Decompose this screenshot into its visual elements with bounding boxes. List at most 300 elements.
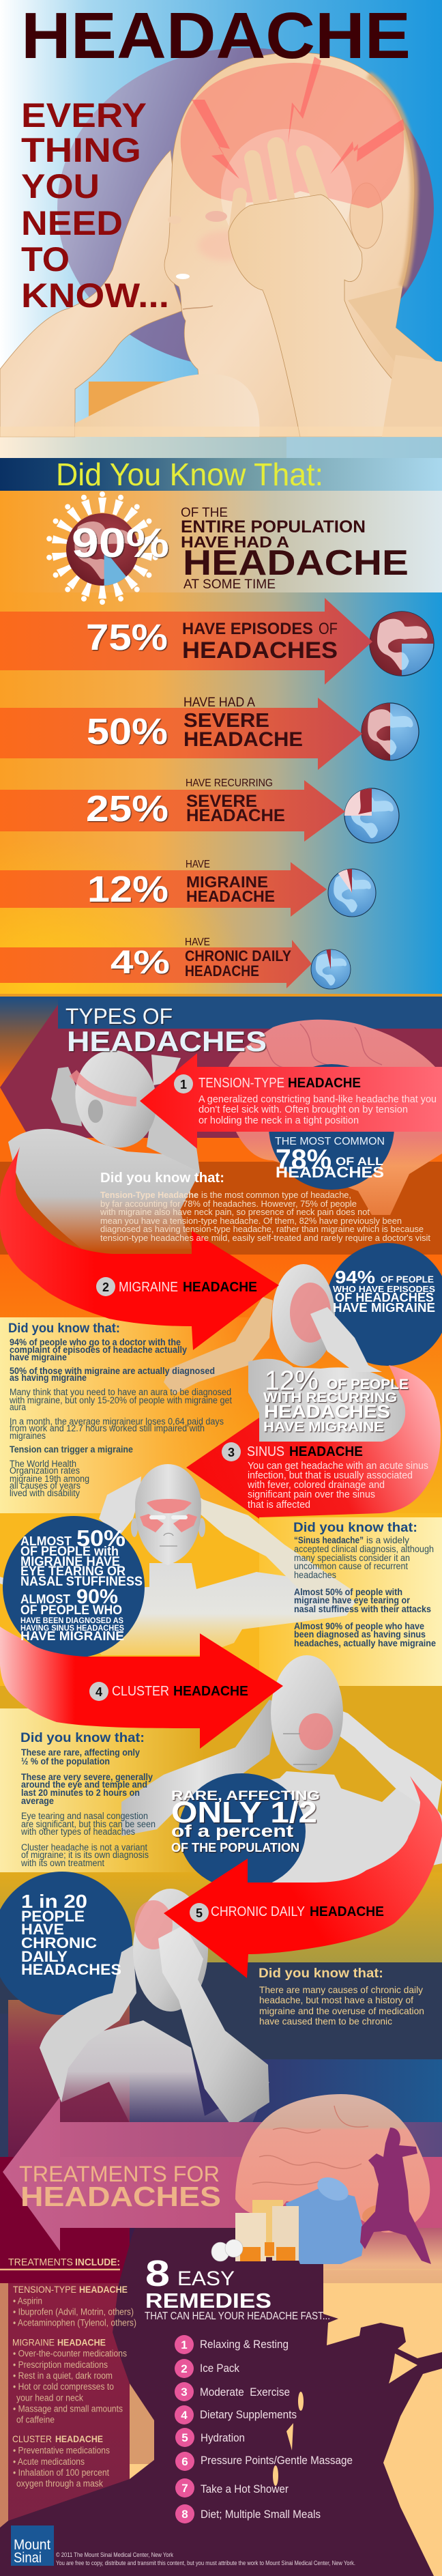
callout: 78 percent: THE MOST COMMON: [275, 1136, 385, 1147]
treatments include: HEADACHE: [57, 2337, 106, 2348]
90 percent caption: HAVE HAD A: [181, 533, 289, 551]
90 percent caption: OF THE: [181, 506, 228, 520]
text: tension-type facts: tension-type headaches are mild, easily self-treated and rarely require a doctor's visit: [100, 1233, 431, 1243]
callout: 1 in 20: PEOPLE: [21, 1908, 85, 1925]
text: migraine facts: migraines: [10, 1431, 46, 1441]
callout: 50 and 90 percent: MIGRAINE HAVE: [20, 1555, 120, 1569]
sinus description: that is affected: [248, 1499, 310, 1511]
treatment bullets: • Acetaminophen (Tylenol, others): [13, 2318, 136, 2328]
tension-type description: don't feel sick with. Often brought on by tension: [198, 1104, 408, 1115]
subtitle: NEED: [21, 204, 123, 242]
remedies list: 5: [181, 2431, 188, 2444]
tension-type heading: [198, 1076, 361, 1091]
text: migraine facts: aura: [10, 1402, 26, 1412]
remedies list: [175, 2335, 353, 2523]
callout: 50 and 90 percent: HAVE BEEN DIAGNOSED AS: [20, 1617, 123, 1625]
man 5 chronic: [40, 1889, 269, 2126]
text: migraine facts: 50% of those with migraine are actually diagnosed: [10, 1366, 215, 1376]
text: cluster facts: These are very severe, generally: [21, 1772, 153, 1782]
cerebellum: [362, 2204, 410, 2229]
text: cluster facts: [20, 1731, 156, 1868]
callout: 12 percent: [263, 1366, 409, 1435]
text: migraine facts: from work and 12.7 hours worked still impaired with: [10, 1423, 205, 1433]
torso: [205, 1771, 442, 1884]
callout: 1 in 20: 1 in 20: [21, 1891, 87, 1912]
90 percent caption: ENTIRE POPULATION: [181, 517, 366, 536]
label: migraine headache: HEADACHE: [183, 1280, 257, 1295]
arrow 4 cluster: [0, 1627, 283, 1749]
treatment bullets: • Ibuprofen (Advil, Motrin, others): [13, 2307, 134, 2317]
arrow 75 percent: HAVE EPISODES: [182, 620, 313, 638]
callout: 50 and 90 percent: NASAL STUFFINESS: [20, 1575, 143, 1589]
text: cluster facts: Eye tearing and nasal congestion: [21, 1811, 148, 1821]
footer credits: You are free to copy, distribute and transmit this content, but you must attribute the work to Mount Sinai Medical Center, New York.: [56, 2560, 355, 2567]
head of man: [164, 53, 442, 437]
callout: 78 percent: OF ALL: [336, 1155, 383, 1168]
text: cluster facts: with other types of headaches: [20, 1827, 135, 1837]
arrow 2 migraine: [0, 1147, 279, 1350]
text: cluster facts: around the eye and temple and: [21, 1779, 147, 1790]
section: treatments: [0, 2094, 442, 2576]
text: migraine facts: In a month, the average migraineur loses 0.64 paid days: [10, 1416, 224, 1427]
circle: 1 in 20: [0, 1872, 132, 2015]
sinus description: You can get headache with an acute sinus: [248, 1460, 428, 1472]
treatment bullets: • Rest in a quiet, dark room: [13, 2371, 113, 2381]
text: sinus facts: “Sinus headache”: [294, 1535, 364, 1545]
sinus description: significant pain over the sinus: [248, 1489, 375, 1500]
text: sinus facts: [293, 1521, 436, 1648]
25 percent value: 25%: [86, 788, 168, 829]
text: chronic daily facts: [259, 1966, 424, 2027]
sinus description: with fever, colored drainage and: [247, 1479, 385, 1491]
text: migraine facts: all causes of years: [10, 1480, 80, 1491]
arrow 4 percent: HEADACHE: [185, 962, 259, 979]
ice pack: [286, 2173, 365, 2264]
tension-type heading: HEADACHE: [288, 1076, 361, 1091]
text: cluster facts: with its own treatment: [20, 1858, 104, 1868]
label: chronic daily headache: 5: [196, 1906, 203, 1920]
ears: [131, 1518, 138, 1537]
remedies list: Relaxing & Resting: [200, 2338, 289, 2351]
text: cluster facts: of migraine; it is its own diagnosis: [21, 1850, 149, 1860]
label: chronic daily headache: [190, 1903, 384, 1922]
migraine panel: [0, 1317, 273, 1513]
90 percent caption: [181, 506, 409, 592]
callout: 1 in 20: CHRONIC: [21, 1934, 97, 1951]
section: did you know statistics: [0, 458, 442, 997]
label: sinus headache: HEADACHE: [289, 1444, 363, 1459]
remedies list: Moderate Exercise: [200, 2386, 290, 2399]
treatments include: MIGRAINE: [12, 2337, 55, 2348]
text: tension-type facts: with migraine also have neck pain, so presence of neck pain does not: [100, 1207, 370, 1217]
text: migraine facts: The World Health: [10, 1459, 76, 1469]
callout: 94 percent: WHO HAVE EPISODES: [333, 1284, 435, 1294]
text: tension-type facts: diagnosed as having tension-type headache, rather than migraine which is because: [100, 1225, 424, 1234]
bordeaux arrow behind title: [0, 1005, 442, 1138]
medication bottles: [235, 2200, 299, 2261]
treatment bullets: • Prescription medications: [13, 2360, 108, 2370]
background circle: [57, 48, 434, 369]
text: chronic daily facts: migraine and the overuse of medication: [259, 2005, 424, 2016]
arrow 12 percent: MIGRAINE: [186, 873, 268, 891]
head: [271, 1655, 343, 1771]
text: sinus facts: Almost 90% of people who have: [294, 1621, 424, 1631]
treatment bullets: • Over-the-counter medications: [13, 2348, 127, 2359]
treatments include: CLUSTER: [12, 2433, 52, 2444]
callout: 50 and 90 percent: EYE TEARING OR: [20, 1564, 126, 1579]
globe 4 percent: [311, 945, 351, 989]
callout: 50 and 90 percent: [20, 1526, 143, 1643]
globe 50 percent: [361, 702, 419, 761]
arrow 1 tension: [140, 1053, 442, 1149]
subtitle: [21, 96, 169, 315]
arrow 50 percent: HAVE HAD A: [183, 696, 255, 710]
text: tension-type facts: Did you know that:: [100, 1171, 224, 1186]
text: migraine facts: Organization rates: [10, 1465, 80, 1476]
pills: [211, 2239, 243, 2261]
lower fade: [0, 427, 442, 458]
globe 25 percent: [344, 788, 400, 844]
arrow 50 percent: SEVERE: [183, 710, 269, 732]
man 1 tension: [8, 1042, 200, 1251]
callout: 12 percent: HAVE MIGRAINE: [263, 1420, 384, 1435]
heading: 8 easy remedies: [145, 2253, 330, 2322]
callout: 94 percent: [333, 1267, 435, 1315]
callout: rare: ONLY 1/2: [171, 1796, 317, 1829]
eyes and mouth: [168, 211, 252, 309]
callout: rare: RARE, AFFECTING: [171, 1789, 320, 1803]
callout: 50 and 90 percent: 50%: [76, 1526, 126, 1551]
tension-type heading: TENSION-TYPE: [198, 1076, 284, 1091]
subtitle: THING: [21, 131, 141, 169]
table edge: [89, 382, 198, 437]
hands: [51, 1067, 82, 1126]
label: chronic daily headache: HEADACHE: [310, 1904, 384, 1919]
remedies list: 4: [181, 2409, 188, 2422]
text: cluster facts: These are rare, affecting only: [21, 1747, 140, 1758]
head shading: [368, 75, 414, 287]
text: cluster facts: last 20 minutes to 2 hours on: [21, 1788, 140, 1798]
head: [135, 1464, 201, 1565]
remedies list: 3: [181, 2386, 188, 2399]
sinus description: infection, but that is usually associated: [248, 1470, 413, 1481]
callout: rare: OF THE POPULATION: [171, 1841, 299, 1855]
text: chronic daily facts: have caused them to be chronic: [259, 2016, 392, 2027]
banner: [0, 458, 442, 491]
subtitle: YOU: [21, 167, 100, 205]
remedies list: 7: [181, 2482, 188, 2495]
man 4 cluster: [121, 1655, 442, 1884]
callout: 1 in 20: HAVE: [21, 1921, 64, 1938]
arrow 25 percent: HEADACHE: [186, 806, 285, 825]
callout: 78 percent: HEADACHES: [276, 1164, 384, 1181]
75 percent value: 75%: [86, 617, 168, 658]
treatments include: TENSION-TYPE: [13, 2284, 76, 2295]
remedies list: 2: [181, 2362, 188, 2375]
text: migraine facts: migraine 19th among: [10, 1474, 89, 1484]
label: chronic daily headache: CHRONIC DAILY: [211, 1904, 305, 1919]
chest: [382, 355, 442, 437]
tension-type description: or holding the neck in a tight position: [198, 1115, 359, 1126]
text: sinus facts: Did you know that:: [293, 1521, 417, 1535]
text: migraine facts: with migraine, but only 15-20% of people with migraine get: [9, 1395, 232, 1405]
label: cluster headache: [89, 1682, 248, 1701]
globe 75 percent: [369, 611, 434, 676]
arrow 4 percent: CHRONIC DAILY: [185, 947, 291, 964]
callout: 50 and 90 percent: ALMOST: [20, 1592, 70, 1606]
50 percent value: 50%: [87, 711, 168, 752]
treatment bullets: • Massage and small amounts: [13, 2404, 123, 2414]
near hand and forearm: [229, 195, 442, 437]
left hand: [99, 1476, 141, 1536]
text: migraine facts: complaint of episodes of headache actually: [10, 1345, 187, 1355]
treatment bullets: • Preventative medications: [13, 2446, 110, 2456]
far arm: [0, 150, 183, 437]
text: sinus facts: accepted clinical diagnosis, although: [294, 1544, 434, 1554]
remedies list: Take a Hot Shower: [201, 2482, 289, 2495]
pain mask: [140, 1499, 197, 1532]
banner heading: Did You Know That:: [56, 457, 323, 492]
text: migraine facts: have migraine: [10, 1352, 67, 1362]
callout: 12 percent: 12%: [265, 1366, 319, 1396]
arrow 50 percent: [0, 696, 362, 770]
arrow 25 percent: [0, 777, 345, 842]
text: cluster facts: are significant, but this can be seen: [21, 1819, 156, 1829]
treatment bullets: • Acute medications: [13, 2457, 85, 2467]
remedies list: Diet; Multiple Small Meals: [201, 2508, 321, 2521]
text: tension-type facts: mean you have a tension-type headache. Of them, 82% have previously been: [100, 1216, 402, 1226]
text: chronic daily facts: There are many causes of chronic daily: [259, 1984, 423, 1995]
90 percent caption: AT SOME TIME: [183, 577, 276, 592]
callout: 50 and 90 percent: OF PEOPLE WHO: [20, 1603, 122, 1618]
arrow 3 sinus: [186, 1365, 441, 1519]
man 2 migraine: [164, 1264, 430, 1442]
text: sinus facts: many specialists consider it an: [294, 1553, 410, 1563]
title: treatments for headaches: [19, 2162, 221, 2212]
label: migraine headache: MIGRAINE: [119, 1280, 178, 1295]
forearm and hand: [194, 1493, 353, 1609]
text: migraine facts: 94% of people who go to a doctor with the: [10, 1337, 181, 1347]
horizontal rule: [0, 2269, 442, 2270]
left arm: [121, 1700, 276, 1836]
arrow 5 chronic: [164, 1776, 442, 1978]
90 percent caption: HEADACHE: [183, 543, 409, 583]
pain glow: [221, 129, 352, 260]
arrow 4 percent: HAVE: [185, 936, 210, 948]
text: migraine facts: Many think that you need to have an aura to be diagnosed: [10, 1387, 231, 1397]
text: sinus facts: headaches: [294, 1570, 336, 1580]
brain illustration: [222, 1020, 442, 1215]
heading: 8 easy remedies: THAT CAN HEAL YOUR HEADACHE FAST...: [145, 2310, 330, 2322]
text: sinus facts: is a widely: [366, 1535, 409, 1545]
text: tension-type facts: by far accounting for 78% of headaches. However, 75% of people: [100, 1199, 357, 1209]
remedies list: 1: [181, 2338, 188, 2351]
brain overlay: [181, 63, 404, 208]
treatment bullets: • Inhalation of 100 percent: [13, 2467, 109, 2478]
pink arrow: [3, 2097, 442, 2251]
text: sinus facts: nasal stuffiness with their attacks: [294, 1604, 431, 1614]
heading: 8 easy remedies: EASY: [177, 2267, 235, 2290]
treatment bullets: • Aspirin: [13, 2296, 42, 2306]
title: types of headaches: [65, 1004, 267, 1057]
treatment bullets: [13, 2296, 136, 2489]
neck shading: [348, 287, 437, 372]
hand fingers: [235, 146, 322, 232]
arrow 4 percent: [0, 936, 312, 988]
callout: 12 percent: HEADACHES: [264, 1401, 390, 1422]
label: migraine headache: [96, 1277, 257, 1296]
circle: 50 and 90 percent: [3, 1516, 145, 1658]
shoulder: [75, 374, 260, 437]
arrow 25 percent: SEVERE: [186, 792, 257, 811]
torso: [248, 1359, 430, 1442]
label: migraine headache: 2: [102, 1280, 109, 1294]
silhouette figure: [360, 2128, 431, 2264]
text: cluster facts: Cluster headache is not a variant: [21, 1842, 147, 1852]
label: sinus headache: SINUS: [247, 1444, 284, 1459]
dark silhouette: [0, 2228, 442, 2576]
callout: 1 in 20: DAILY: [21, 1948, 68, 1965]
90 percent figure: 90%: [72, 520, 169, 566]
text: migraine facts: Did you know that:: [8, 1321, 120, 1336]
treatments include: TREATMENTS: [8, 2257, 73, 2268]
text: migraine facts: as having migraine: [10, 1373, 87, 1383]
callout: 12 percent: OF PEOPLE: [327, 1377, 409, 1392]
title: treatments for headaches: TREATMENTS FOR: [19, 2162, 220, 2186]
callout: 1 in 20: [21, 1891, 121, 1978]
footer credits: © 2011 The Mount Sinai Medical Center, New York: [56, 2551, 173, 2559]
pain area: [290, 1283, 331, 1343]
callout: 78 percent: 78%: [276, 1143, 332, 1175]
title: types of headaches: HEADACHES: [67, 1025, 267, 1057]
sinus panel: [259, 1517, 442, 1686]
main title: HEADACHE: [21, 0, 411, 72]
callout: 50 and 90 percent: HAVE MIGRAINE: [20, 1629, 124, 1643]
section: types of headaches background: [0, 997, 442, 2287]
lower page backgrounds: [0, 2283, 442, 2576]
brain: [235, 2094, 430, 2233]
text: sinus facts: headaches, actually have migraine: [294, 1638, 436, 1648]
remedies list: Hydration: [201, 2431, 245, 2444]
silhouette gaps: [273, 2353, 417, 2486]
arrow 50 percent: HEADACHE: [183, 728, 303, 751]
remedies list: Dietary Supplements: [200, 2408, 297, 2421]
treatment bullets: oxygen through a mask: [16, 2478, 103, 2489]
number 1: 1: [180, 1078, 187, 1091]
label: sinus headache: 3: [228, 1446, 235, 1459]
text: chronic daily facts: headache, but most have a history of: [259, 1994, 413, 2005]
callout: 78 percent: [275, 1136, 385, 1181]
title: treatments for headaches: HEADACHES: [20, 2181, 221, 2212]
label: sinus headache: [222, 1442, 428, 1511]
circle: 94 percent: [326, 1243, 442, 1366]
arm: [164, 1297, 273, 1394]
pain band: [73, 1073, 136, 1102]
text: migraine facts: [8, 1321, 232, 1498]
torso: [8, 1129, 200, 1251]
callout: rare: of a percent: [171, 1822, 294, 1841]
4 percent value: 4%: [110, 945, 170, 981]
arrow 75 percent: [0, 598, 372, 685]
sinus description: [247, 1460, 428, 1511]
globe 12 percent: [328, 864, 376, 917]
face: [283, 1734, 317, 1764]
nose and mouth: [160, 1533, 177, 1546]
treatments include: HEADACHE: [55, 2433, 103, 2444]
callout: 94 percent: HAVE MIGRAINE: [333, 1301, 435, 1315]
text: sinus facts: migraine have eye tearing or: [294, 1595, 411, 1605]
tension-type description: A generalized constricting band-like headache that you: [198, 1093, 437, 1105]
treatments list panel: [8, 2283, 130, 2522]
subtitle: TO: [21, 240, 70, 278]
text: tension-type facts: is the most common type of headache,: [201, 1190, 351, 1200]
remedies list: Pressure Points/Gentle Massage: [201, 2454, 353, 2467]
circle: rare: [179, 1773, 306, 1889]
treatment bullets: your head or neck: [16, 2393, 83, 2403]
circle: most common: [269, 1064, 394, 1190]
footer credits: [56, 2551, 355, 2567]
treatments include: [8, 2257, 128, 2444]
callout: 1 in 20: HEADACHES: [21, 1961, 121, 1978]
label: cluster headache: 4: [95, 1685, 102, 1699]
section: hero illustration: [0, 0, 442, 458]
logo: Mount Sinai: Mount: [14, 2537, 50, 2553]
man 3 sinus: [0, 1464, 355, 1655]
treatment bullets: of caffeine: [16, 2415, 55, 2425]
callout: 50 and 90 percent: ALMOST: [20, 1534, 72, 1548]
text: tension-type facts: [100, 1171, 431, 1243]
text: cluster facts: ½ % of the population: [21, 1756, 110, 1766]
callout: 50 and 90 percent: HAVING SINUS HEADACHES: [20, 1625, 124, 1633]
callout: 94 percent: 94%: [335, 1267, 375, 1287]
tension-type description: [198, 1093, 437, 1126]
remedies list: 6: [181, 2455, 188, 2468]
callout: 94 percent: OF PEOPLE: [381, 1274, 434, 1285]
label: cluster headache: CLUSTER: [112, 1684, 169, 1699]
hand: [310, 1307, 382, 1372]
callout: 50 and 90 percent: 90%: [76, 1586, 118, 1608]
text: sinus facts: been diagnosed as having sinus: [294, 1629, 426, 1640]
text: tension-type facts: Tension-Type Headache: [100, 1190, 198, 1200]
callout: rare: [171, 1789, 320, 1855]
arrow 12 percent: HEADACHE: [186, 887, 275, 905]
ear: [350, 183, 383, 248]
treatments include: INCLUDE:: [75, 2257, 120, 2268]
remedies list: 8: [181, 2508, 188, 2521]
head: [272, 1264, 335, 1366]
logo: Mount Sinai: Sinai: [14, 2550, 42, 2566]
torso: [40, 2020, 269, 2123]
logo: Mount Sinai: [11, 2525, 54, 2566]
torso: [0, 1563, 355, 1655]
subtitle: KNOW...: [21, 276, 169, 315]
arrow 75 percent: HEADACHES: [182, 638, 338, 663]
text: cluster facts: Did you know that:: [20, 1731, 145, 1745]
text: migraine facts: lived with disability: [10, 1488, 80, 1498]
90 percent globe with people: [46, 491, 169, 605]
title: types of headaches: TYPES OF: [65, 1004, 173, 1029]
arrow 12 percent: HAVE: [186, 859, 210, 870]
text: sinus facts: uncommon cause of recurrent: [294, 1561, 408, 1571]
lightning bolts: [192, 57, 404, 179]
pain area: [299, 1713, 333, 1750]
near arm: [158, 1925, 269, 2126]
treatments include: HEADACHE: [79, 2284, 128, 2295]
right arm: [327, 1706, 442, 1816]
arrow 12 percent: [0, 859, 327, 917]
text: sinus facts: Almost 50% of people with: [294, 1587, 402, 1597]
head: [133, 1889, 208, 2012]
